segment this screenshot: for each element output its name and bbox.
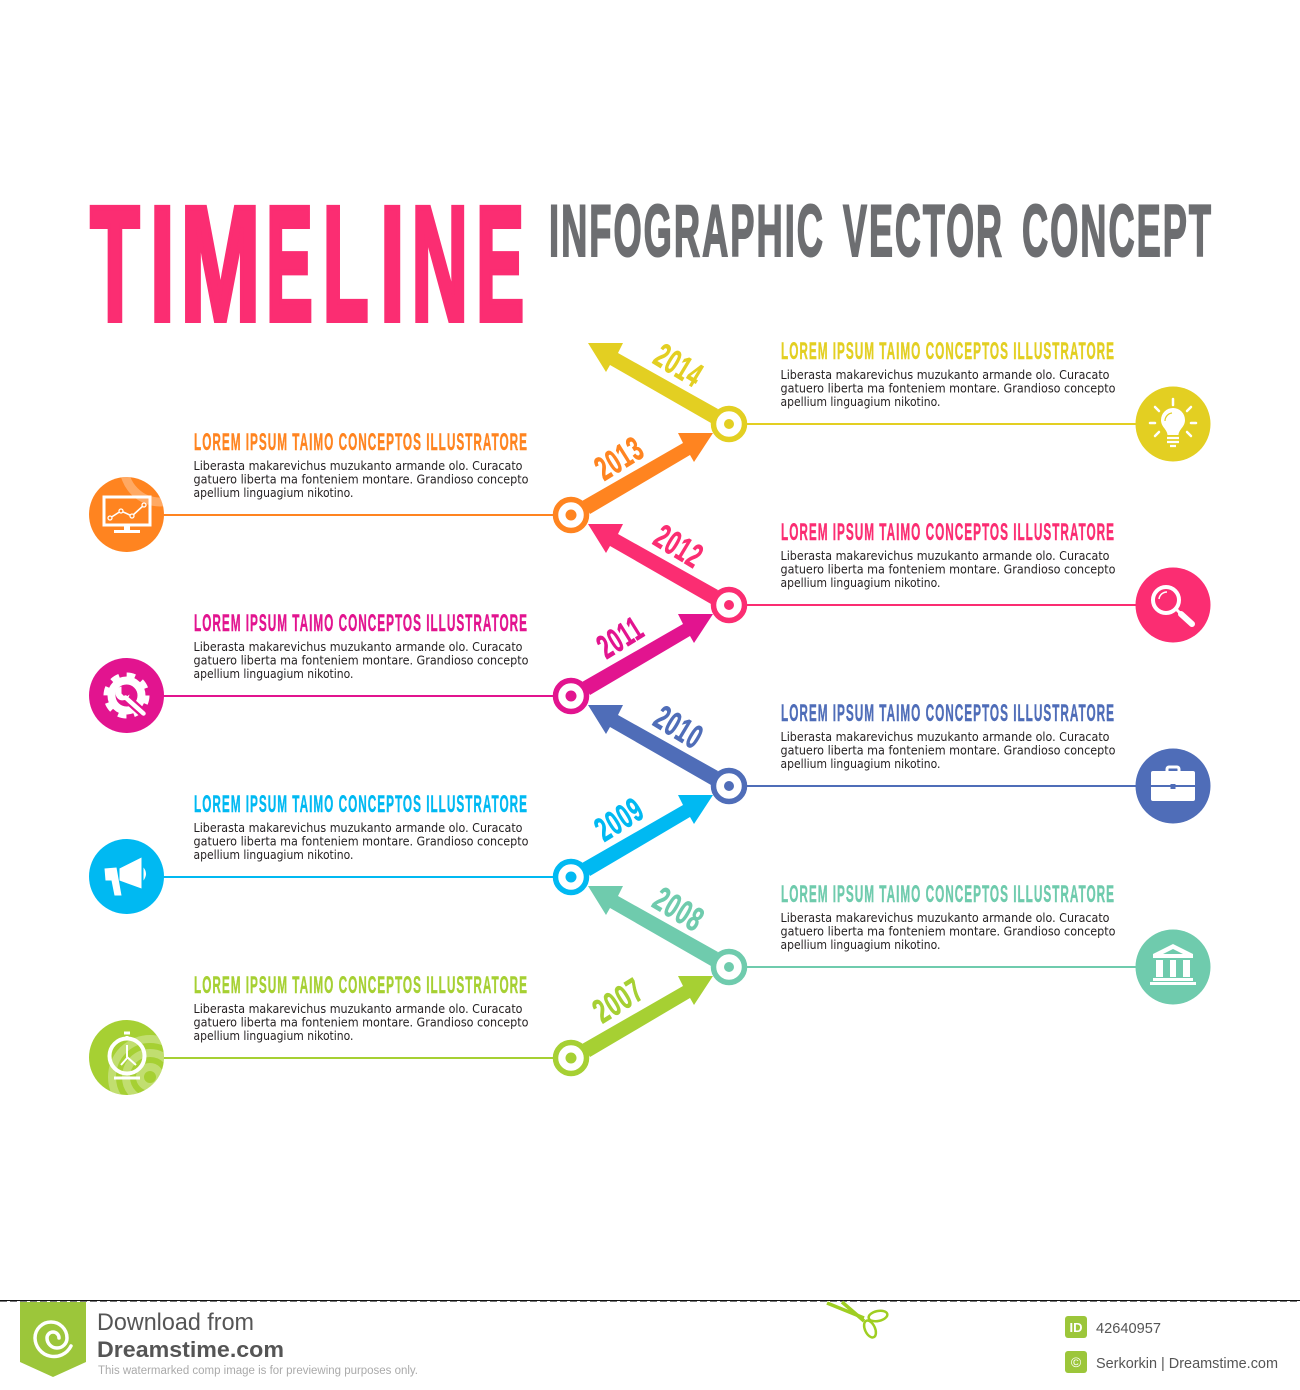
text: preview note: This watermarked comp image is for previewing purposes only.	[98, 1365, 418, 1377]
body text: gatuero liberta ma fonteniem montare. Grandioso concepto	[780, 562, 1116, 576]
panel: 2013	[89, 429, 713, 552]
title: TIMELINE: E	[266, 172, 313, 355]
arrow	[582, 976, 713, 1057]
connector line	[745, 785, 1137, 787]
panel: 2011	[89, 609, 713, 733]
footer: watermark strip	[0, 1300, 1300, 1377]
body text: gatuero liberta ma fonteniem montare. Grandioso concepto	[194, 834, 528, 848]
icon: clock	[89, 1020, 164, 1095]
body text: gatuero liberta ma fonteniem montare. Grandioso concepto	[194, 652, 528, 668]
connector line	[163, 514, 555, 516]
connector line	[745, 423, 1137, 425]
icon: gear and wrench	[89, 658, 164, 733]
body text: apellium linguagium nikotino.	[780, 937, 940, 952]
panel: 2007: LOREM IPSUM TAIMO CONCEPTOS ILLUSTRATORE	[194, 972, 528, 999]
icon: monitor chart	[89, 477, 164, 552]
body text: Liberasta makarevichus muzukanto armande olo. Curacato	[780, 548, 1110, 563]
body text	[194, 820, 528, 862]
timeline node	[714, 770, 744, 802]
panel: 2007	[89, 976, 713, 1095]
title: TIMELINE: I	[150, 172, 174, 355]
body text: Liberasta makarevichus muzukanto armande olo. Curacato	[194, 820, 522, 835]
subtitle: infographic vector concept: VECTOR	[843, 191, 1004, 272]
body text: gatuero liberta ma fonteniem montare. Grandioso concepto	[194, 472, 528, 486]
year label: 2008	[646, 880, 711, 940]
icon: copyright badge	[1065, 1351, 1087, 1373]
icon: copyright badge: ©	[1071, 1354, 1082, 1370]
connector line	[745, 966, 1137, 968]
body text: apellium linguagium nikotino.	[780, 394, 940, 409]
body text: apellium linguagium nikotino.	[194, 847, 354, 862]
badge: dreamstime logo	[20, 1302, 86, 1377]
connector line	[163, 1057, 555, 1059]
body text: gatuero liberta ma fonteniem montare. Grandioso concepto	[194, 1014, 528, 1030]
body text: Liberasta makarevichus muzukanto armande olo. Curacato	[194, 639, 522, 654]
body text	[194, 639, 528, 681]
timeline node	[714, 952, 744, 982]
body text	[780, 910, 1116, 952]
connector line	[163, 695, 555, 697]
panel: 2009	[89, 790, 713, 914]
dashed cut line	[0, 1300, 1300, 1302]
body text: gatuero liberta ma fonteniem montare. Grandioso concepto	[780, 924, 1116, 938]
year label: 2010	[647, 699, 710, 757]
icon: id badge: ID	[1070, 1320, 1082, 1335]
year label: 2012	[647, 518, 710, 576]
timeline node	[714, 408, 744, 440]
arrow	[588, 705, 718, 785]
year label: 2011	[591, 609, 651, 666]
body text	[194, 458, 528, 500]
panel: 2008	[588, 880, 1210, 1004]
panel: 2010	[588, 699, 1210, 824]
title: TIMELINE: T	[90, 172, 140, 355]
arrow	[582, 795, 713, 876]
icon: bank building	[1136, 930, 1210, 1004]
subtitle: infographic vector concept: INFOGRAPHIC	[549, 191, 825, 272]
panel: 2012	[588, 518, 1210, 642]
icon: scissors	[827, 1302, 888, 1339]
body text: Liberasta makarevichus muzukanto armande olo. Curacato	[194, 458, 522, 473]
text: E	[476, 172, 524, 355]
year label: 2007	[586, 971, 651, 1031]
text: dreamstime.com: Dreamstime.com	[97, 1337, 284, 1362]
panel: 2013: LOREM IPSUM TAIMO CONCEPTOS ILLUSTRATORE	[194, 429, 528, 456]
title: TIMELINE: I	[380, 172, 404, 355]
panel: 2009: LOREM IPSUM TAIMO CONCEPTOS ILLUSTRATORE	[194, 791, 528, 818]
year label: 2014	[647, 337, 710, 395]
title: TIMELINE: L	[323, 172, 369, 355]
year label: 2013	[588, 429, 651, 488]
body text: Liberasta makarevichus muzukanto armande olo. Curacato	[194, 1001, 522, 1016]
body text: apellium linguagium nikotino.	[780, 575, 940, 590]
icon: light bulb	[1136, 386, 1210, 462]
body text: Liberasta makarevichus muzukanto armande olo. Curacato	[780, 367, 1110, 382]
body text	[194, 1001, 528, 1043]
timeline node	[556, 1042, 586, 1074]
body text: apellium linguagium nikotino.	[780, 756, 940, 771]
body text: Liberasta makarevichus muzukanto armande olo. Curacato	[780, 910, 1110, 925]
body text: Liberasta makarevichus muzukanto armande olo. Curacato	[780, 729, 1110, 744]
panel: 2014	[588, 337, 1210, 462]
body text: apellium linguagium nikotino.	[194, 666, 354, 681]
icon: magnifier	[1136, 568, 1210, 642]
arrow	[582, 614, 713, 695]
text: image id: 42640957	[1096, 1320, 1161, 1337]
body text	[780, 548, 1116, 590]
body text	[780, 367, 1116, 409]
arrow	[582, 433, 713, 514]
arrow	[588, 343, 718, 423]
body text	[780, 729, 1116, 771]
icon: briefcase	[1136, 748, 1210, 824]
connector line	[163, 876, 555, 878]
arrow	[588, 886, 718, 966]
timeline node	[556, 680, 586, 712]
body text: apellium linguagium nikotino.	[194, 485, 354, 500]
body text: apellium linguagium nikotino.	[194, 1028, 354, 1043]
connector line	[745, 604, 1137, 606]
title: TIMELINE: M	[180, 172, 260, 355]
year label: 2009	[588, 790, 651, 849]
icon: megaphone	[89, 839, 164, 914]
timeline node	[714, 590, 744, 620]
body text: gatuero liberta ma fonteniem montare. Grandioso concepto	[780, 742, 1116, 758]
timeline node	[556, 862, 586, 892]
icon: id badge	[1065, 1316, 1087, 1338]
text: copyright credit: Serkorkin | Dreamstime.com	[1096, 1355, 1278, 1372]
timeline node	[556, 500, 586, 530]
title: TIMELINE: N	[412, 172, 468, 355]
text: download from: Download from	[97, 1309, 254, 1336]
arrow	[588, 524, 718, 604]
body text: gatuero liberta ma fonteniem montare. Grandioso concepto	[780, 380, 1116, 396]
panel: 2011: LOREM IPSUM TAIMO CONCEPTOS ILLUSTRATORE	[194, 610, 528, 637]
